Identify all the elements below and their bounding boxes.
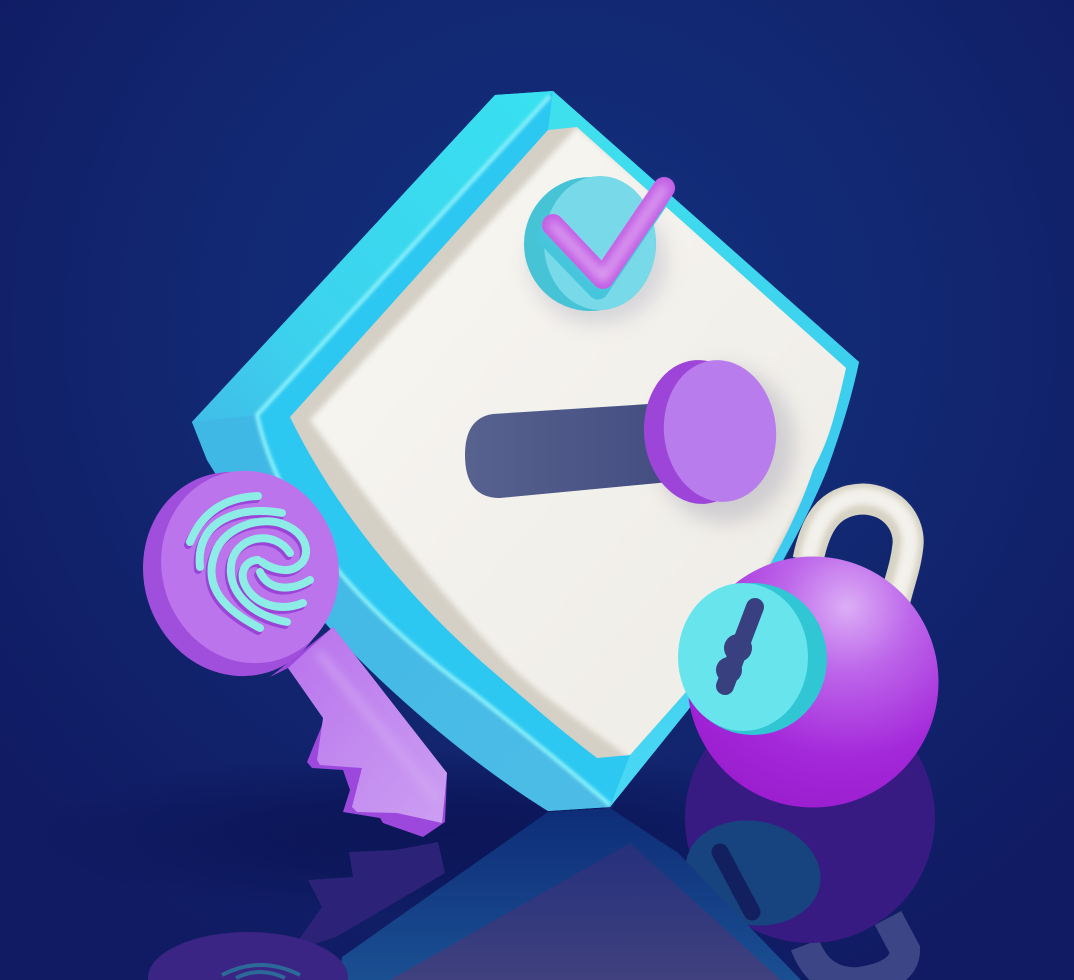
check badge bbox=[524, 176, 666, 324]
reflection: padlock bbox=[677, 693, 935, 980]
shield bbox=[192, 91, 860, 811]
shield: lower-left bevel bbox=[192, 415, 610, 811]
shield: body bbox=[192, 91, 859, 811]
fingerprint bbox=[188, 496, 310, 631]
check mark bbox=[547, 188, 664, 289]
padlock shackle bbox=[808, 496, 910, 600]
toggle knob side bbox=[639, 356, 761, 508]
toggle shadow bbox=[655, 367, 795, 523]
padlock body bbox=[688, 556, 938, 808]
key bow side bbox=[117, 447, 357, 701]
keyhole bbox=[716, 607, 755, 686]
toggle switch bbox=[465, 355, 795, 523]
shield: upper-left band bbox=[192, 91, 553, 422]
padlock keyhole plate side bbox=[679, 583, 827, 735]
key blade top bbox=[288, 627, 447, 823]
reflection: shield, key and padlock bbox=[148, 693, 935, 980]
badge shadow bbox=[530, 200, 666, 324]
toggle track bbox=[465, 402, 680, 498]
shield: white face bbox=[310, 127, 860, 760]
key blade side bbox=[270, 627, 447, 837]
floor shadow bbox=[30, 750, 870, 920]
key bow top bbox=[136, 448, 364, 686]
key blade highlight bbox=[318, 652, 438, 800]
fingerprint ridges bbox=[190, 496, 310, 628]
toggle knob top bbox=[657, 355, 783, 507]
reflection: shield bbox=[339, 808, 801, 980]
shield: ridge highlight bbox=[257, 96, 610, 805]
badge disc side bbox=[524, 177, 656, 311]
padlock bbox=[678, 496, 938, 808]
fingerprint shadow bbox=[188, 499, 308, 631]
shield: face edge bbox=[290, 127, 846, 758]
padlock keyhole plate top bbox=[678, 583, 808, 731]
key bbox=[117, 447, 447, 837]
badge disc top bbox=[544, 176, 656, 310]
reflection: key bbox=[148, 842, 445, 980]
shield: right rim bbox=[548, 91, 859, 807]
